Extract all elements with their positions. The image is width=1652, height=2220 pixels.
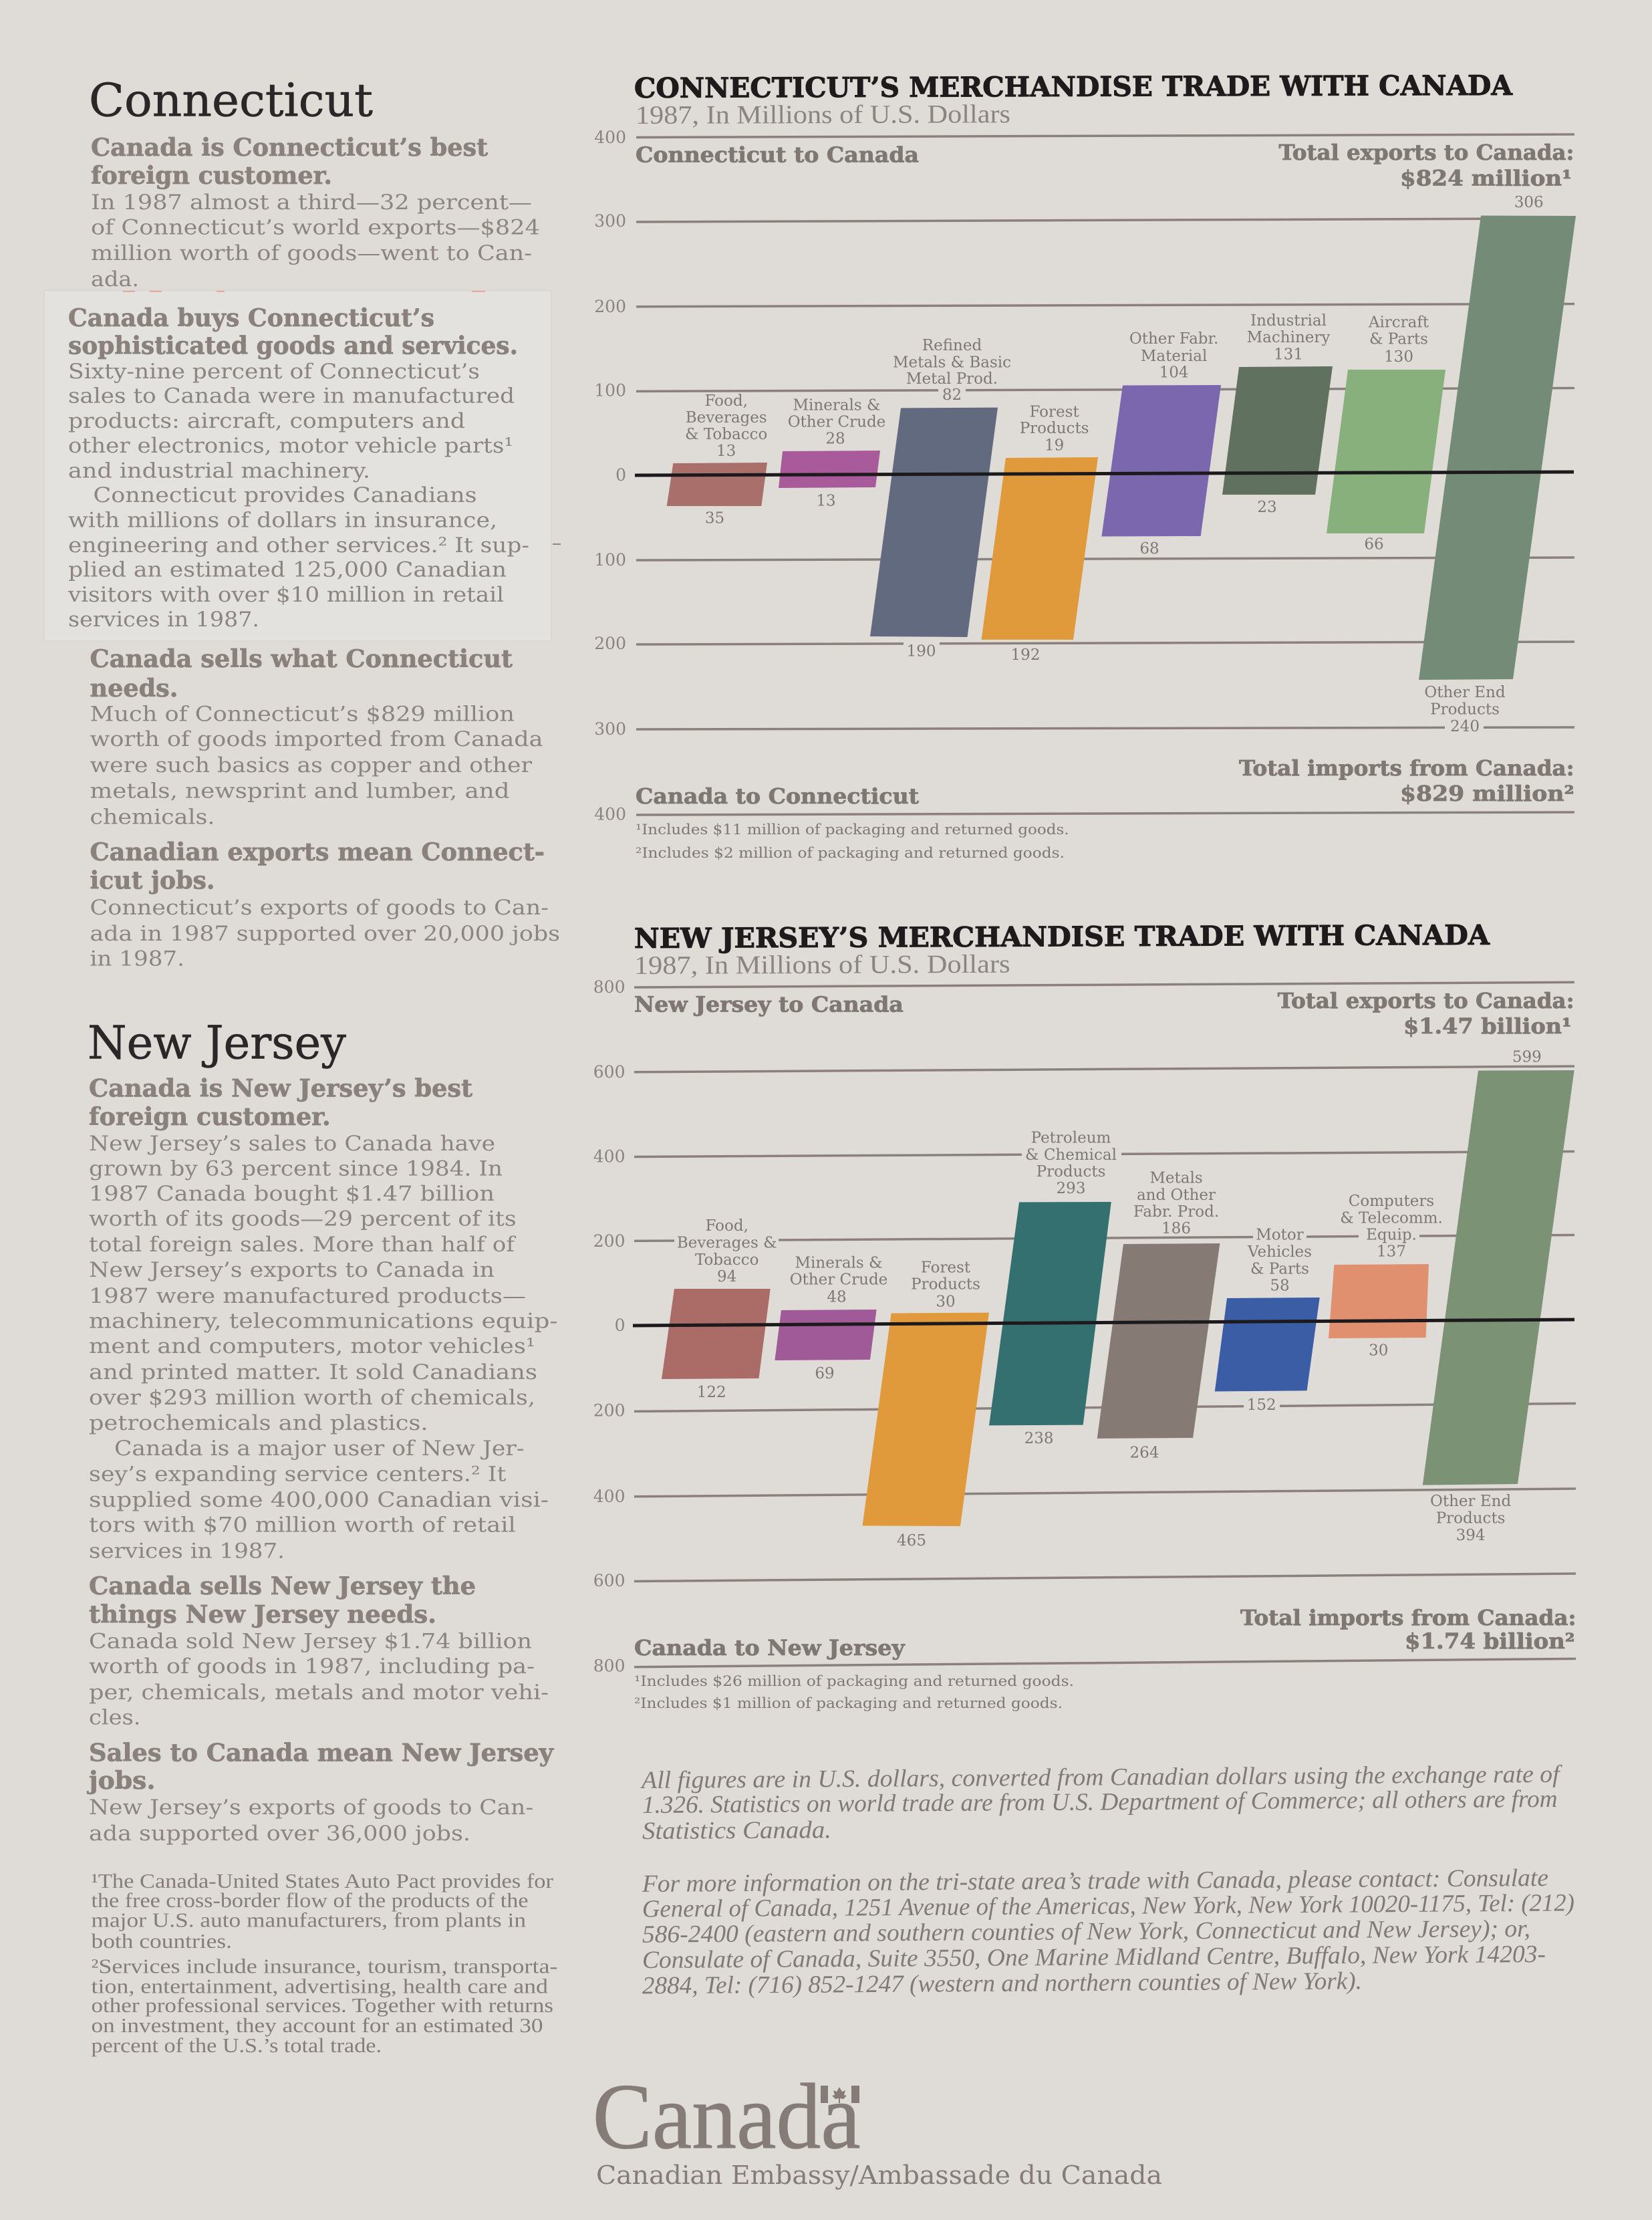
- bar: minerals and other crude: [775, 1310, 877, 1360]
- text block: currency note: All figures are in U.S. dollars, converted from Canadian dollars using the exchange rate of: [640, 1761, 1563, 1794]
- y axis labels: 600: [593, 1571, 626, 1590]
- import labels: [705, 492, 1506, 735]
- export labels: Metal Prod.: [906, 370, 998, 388]
- text block: column footnotes: ²Services include insurance, tourism, transporta-: [91, 1955, 557, 1978]
- text block: best foreign customer: sey’s expanding service centers.² It: [89, 1463, 507, 1487]
- y axis labels: 100: [594, 381, 626, 400]
- bar: other end products: [1423, 1070, 1574, 1485]
- text block: Sales to Canada mean New Jersey jobs: [87, 1739, 554, 1846]
- text block: Canada sells what Connecticut needs: chemicals.: [90, 805, 215, 829]
- bar: refined metals: [870, 408, 998, 637]
- chart title: CONNECTICUT’S MERCHANDISE TRADE WITH CANADA: [634, 70, 1513, 104]
- text block: Canada sells what Connecticut needs: Canada sells what Connecticut: [90, 645, 513, 673]
- export labels: Refined: [922, 337, 982, 354]
- export labels: Products: [1020, 420, 1089, 437]
- export labels: 137: [1377, 1243, 1406, 1261]
- import labels: 264: [1130, 1445, 1159, 1462]
- panel: pasted correction patch: sales to Canada were in manufactured: [68, 384, 515, 408]
- y axis labels: 300: [594, 719, 626, 739]
- export labels: 28: [825, 430, 845, 448]
- panel: Connecticut trade chart: [594, 70, 1576, 861]
- text block: column footnotes: percent of the U.S.’s total trade.: [91, 2033, 382, 2057]
- bar: food, beverages and tobacco: [662, 1289, 771, 1379]
- import labels: 69: [815, 1365, 835, 1382]
- text block: best foreign customer: petrochemicals and plastics.: [89, 1411, 428, 1435]
- bar: minerals and other crude: [779, 451, 880, 488]
- import labels: 238: [1024, 1430, 1054, 1447]
- text block: Sales to Canada mean New Jersey jobs: New Jersey’s exports of goods to Can-: [89, 1796, 533, 1820]
- text block: currency note: 1.326. Statistics on world trade are from U.S. Department of Commerce; all others are from: [642, 1785, 1558, 1819]
- export labels: Fabr. Prod.: [1133, 1203, 1219, 1221]
- export labels: 104: [1159, 364, 1189, 381]
- total exports callout: Total exports to Canada:: [1279, 140, 1574, 165]
- chart footnotes: ²Includes $2 million of packaging and returned goods.: [636, 845, 1065, 861]
- export labels: Other Fabr.: [1129, 330, 1218, 348]
- text block: best foreign customer: Canada is New Jersey’s best: [89, 1075, 472, 1103]
- total imports callout: $1.74 billion²: [1405, 1628, 1575, 1654]
- text block: best foreign customer: 1987 Canada bought $1.47 billion: [89, 1182, 495, 1206]
- imports header: Canada to Connecticut: [636, 783, 919, 809]
- text block: best foreign customer: foreign customer.: [89, 1103, 331, 1131]
- y axis labels: 800: [593, 1656, 626, 1676]
- text block: best foreign customer: machinery, telecommunications equip-: [89, 1309, 557, 1333]
- export labels: 94: [717, 1268, 736, 1285]
- import labels: 66: [1364, 536, 1384, 553]
- export labels: Other Crude: [790, 1271, 887, 1289]
- export labels: Metals & Basic: [893, 354, 1011, 372]
- export labels: 19: [1045, 437, 1064, 454]
- import labels: 30: [1369, 1342, 1388, 1359]
- text block: currency note: [640, 1761, 1563, 1845]
- imports header: Canada to New Jersey: [634, 1635, 906, 1660]
- total imports callout: [1240, 1605, 1576, 1654]
- panel: Connecticut text column: [44, 75, 561, 971]
- text block: best foreign customer: foreign customer.: [91, 162, 332, 190]
- y axis labels: 200: [593, 1231, 626, 1251]
- exports header: New Jersey to Canada: [634, 992, 904, 1017]
- y axis labels: 100: [594, 550, 626, 570]
- text block: best foreign customer: of Connecticut’s world exports—$824: [91, 215, 540, 239]
- panel: pasted correction patch: products: aircraft, computers and: [68, 409, 465, 433]
- y axis labels: 800: [593, 977, 626, 997]
- panel: pasted correction patch: engineering and other services.² It sup-: [68, 533, 529, 558]
- y axis labels: 200: [593, 1401, 626, 1421]
- export labels: Industrial: [1250, 312, 1327, 330]
- y axis labels: 200: [594, 634, 626, 653]
- export labels: Aircraft: [1368, 314, 1429, 332]
- export labels: Computers: [1349, 1193, 1434, 1210]
- export labels: 58: [1270, 1277, 1290, 1294]
- heading: New Jersey: New Jersey: [88, 1017, 347, 1070]
- export labels: Food,: [705, 1217, 748, 1235]
- bar: other end products: [1419, 215, 1576, 680]
- text block: best foreign customer: ment and computers, motor vehicles¹: [89, 1334, 535, 1358]
- total imports callout: Total imports from Canada:: [1240, 1605, 1576, 1630]
- import labels: 465: [897, 1532, 926, 1550]
- export labels: 30: [936, 1293, 956, 1311]
- text block: contact information: 2884, Tel: (716) 852-1247 (western and northern counties of New York).: [642, 1967, 1362, 1999]
- text block: best foreign customer: tors with $70 million worth of retail: [89, 1513, 516, 1537]
- text block: best foreign customer: supplied some 400,000 Canadian visi-: [89, 1488, 549, 1512]
- export labels: Equip.: [1366, 1227, 1417, 1244]
- export labels: 293: [1057, 1180, 1085, 1197]
- export labels: Material: [1141, 348, 1207, 365]
- text block: Sales to Canada mean New Jersey jobs: ada supported over 36,000 jobs.: [89, 1822, 470, 1846]
- export labels: 130: [1384, 348, 1413, 366]
- export labels: & Parts: [1369, 330, 1428, 348]
- text block: Canada sells New Jersey the things it needs: cles.: [89, 1706, 140, 1730]
- panel: pasted correction patch: sophisticated goods and services.: [68, 332, 518, 360]
- text block: best foreign customer: worth of its goods—29 percent of its: [89, 1207, 517, 1231]
- y axis labels: [594, 128, 626, 824]
- bar: computers and telecommunications equipment: [1329, 1264, 1429, 1338]
- total imports callout: Total imports from Canada:: [1239, 755, 1574, 781]
- signature: Canadian Embassy: Canadian Embassy/Ambassade du Canada: [596, 2161, 1162, 2190]
- chart subtitle: 1987, In Millions of U.S. Dollars: [634, 950, 1010, 980]
- export labels: & Telecomm.: [1340, 1210, 1443, 1227]
- zero baseline: [635, 472, 1574, 475]
- text block: Canada sells New Jersey the things it needs: per, chemicals, metals and motor vehi-: [89, 1681, 549, 1705]
- total exports callout: [1278, 988, 1574, 1039]
- export labels: Tobacco: [695, 1251, 759, 1269]
- export labels: [685, 194, 1544, 460]
- total exports callout: Total exports to Canada:: [1278, 988, 1574, 1013]
- text block: contact information: Consulate of Canada, Suite 3550, One Marine Midland Centre, Buffalo, New York 14203-: [642, 1941, 1546, 1974]
- panel: pasted correction patch: visitors with over $10 million in retail: [67, 583, 504, 607]
- text block: Canadian exports mean Connecticut jobs: [90, 838, 560, 971]
- text block: best foreign customer: grown by 63 percent since 1984. In: [89, 1156, 503, 1181]
- text block: Canada sells what Connecticut needs: worth of goods imported from Canada: [90, 727, 543, 751]
- text block: Canadian exports mean Connecticut jobs: icut jobs.: [90, 866, 215, 894]
- export labels: 48: [827, 1289, 847, 1306]
- import labels: 35: [705, 509, 724, 527]
- text block: Sales to Canada mean New Jersey jobs: jobs.: [87, 1767, 155, 1795]
- chart title: NEW JERSEY’S MERCHANDISE TRADE WITH CANADA: [634, 919, 1490, 955]
- text block: column footnotes: the free cross-border flow of the products of the: [91, 1888, 528, 1912]
- text block: Canada sells New Jersey the things it needs: worth of goods in 1987, including pa-: [89, 1654, 535, 1679]
- text block: Canadian exports mean Connecticut jobs: in 1987.: [90, 947, 184, 971]
- text block: Sales to Canada mean New Jersey jobs: Sales to Canada mean New Jersey: [89, 1739, 554, 1767]
- export labels: 186: [1161, 1220, 1191, 1237]
- export labels: Products: [1037, 1163, 1105, 1181]
- export labels: Minerals &: [795, 1255, 882, 1272]
- text block: contact information: For more information on the tri-state area’s trade with Canada, please contact: Consulate: [642, 1864, 1548, 1898]
- panel: New Jersey text column: [87, 1017, 558, 2057]
- export labels: 13: [716, 443, 736, 460]
- y axis labels: 400: [594, 128, 626, 147]
- text block: column footnotes: other professional services. Together with returns: [91, 1993, 553, 2017]
- export labels: Beverages: [686, 409, 767, 426]
- heading: Connecticut: Connecticut: [89, 75, 373, 127]
- text block: best foreign customer: Canada is Connecticut’s best: [91, 134, 488, 162]
- export labels: Machinery: [1247, 329, 1330, 346]
- import labels: Products: [1430, 701, 1500, 719]
- bar: food, beverages and tobacco: [667, 463, 767, 506]
- total exports callout: $1.47 billion¹: [1403, 1013, 1572, 1039]
- text block: Canada sells what Connecticut needs: needs.: [90, 674, 178, 703]
- text block: Canada sells what Connecticut needs: metals, newsprint and lumber, and: [90, 779, 509, 804]
- text block: Canadian exports mean Connecticut jobs: ada in 1987 supported over 20,000 jobs: [90, 922, 560, 946]
- bar: petroleum and chemical products: [989, 1202, 1111, 1425]
- panel: pasted correction patch: other electronics, motor vehicle parts¹: [68, 434, 513, 458]
- import labels: 152: [1247, 1396, 1276, 1414]
- text block: Canada sells New Jersey the things it needs: things New Jersey needs.: [89, 1600, 436, 1628]
- icon: flag symbol: [821, 2086, 859, 2103]
- export labels: & Chemical: [1025, 1146, 1117, 1164]
- bar: metals and other fabricated products: [1097, 1243, 1220, 1439]
- y axis labels: 200: [594, 297, 626, 316]
- y axis labels: 0: [615, 1316, 626, 1335]
- chart subtitle: 1987, In Millions of U.S. Dollars: [636, 100, 1010, 130]
- text block: best foreign customer: million worth of goods—went to Can-: [91, 241, 532, 265]
- text block: best foreign customer: [91, 134, 540, 291]
- export labels: [677, 1049, 1542, 1311]
- text block: best foreign customer: [89, 1075, 557, 1563]
- import labels: Products: [1436, 1510, 1505, 1527]
- text block: best foreign customer: In 1987 almost a third—32 percent—: [91, 191, 532, 215]
- panel: pasted correction patch: services in 1987.: [68, 608, 259, 632]
- import labels: Other End: [1424, 684, 1506, 701]
- import labels: 394: [1456, 1527, 1486, 1544]
- text block: best foreign customer: 1987 were manufactured products—: [89, 1284, 526, 1308]
- export labels: and Other: [1137, 1187, 1216, 1204]
- export labels: & Parts: [1250, 1261, 1309, 1278]
- import labels: 68: [1139, 540, 1159, 558]
- import labels: Other End: [1430, 1493, 1511, 1510]
- panel: pasted correction patch: Sixty-nine percent of Connecticut’s: [68, 360, 480, 384]
- export labels: Other Crude: [788, 414, 885, 431]
- text block: column footnotes: tion, entertainment, advertising, health care and: [91, 1975, 549, 1998]
- panel: pasted correction patch: Canada buys Connecticut’s: [68, 304, 434, 332]
- total exports callout: [1279, 140, 1574, 191]
- text block: contact information: General of Canada, 1251 Avenue of the Americas, New York, New York 10020-1175, Tel: (212): [642, 1889, 1574, 1923]
- export labels: Metals: [1149, 1169, 1203, 1187]
- text block: best foreign customer: ada.: [91, 267, 139, 291]
- export labels: Motor: [1256, 1227, 1304, 1244]
- export labels: 599: [1512, 1049, 1542, 1066]
- import labels: 13: [816, 492, 836, 509]
- text block: best foreign customer: Canada is a major user of New Jer-: [114, 1437, 524, 1461]
- export labels: & Tobacco: [685, 426, 767, 443]
- text block: best foreign customer: and printed matter. It sold Canadians: [89, 1360, 537, 1384]
- import labels: [697, 1342, 1511, 1550]
- text block: best foreign customer: services in 1987.: [89, 1539, 285, 1563]
- text block: Canadian exports mean Connecticut jobs: Connecticut’s exports of goods to Can-: [90, 896, 549, 920]
- panel: pasted correction patch: [44, 290, 551, 641]
- panel: pasted correction patch: Connecticut provides Canadians: [94, 483, 477, 507]
- y axis labels: 0: [615, 465, 626, 485]
- text block: column footnotes: ¹The Canada-United States Auto Pact provides for: [91, 1869, 554, 1892]
- panel: pasted correction patch: and industrial machinery.: [68, 459, 370, 483]
- text block: column footnotes: major U.S. auto manufacturers, from plants in: [91, 1908, 527, 1932]
- export labels: Petroleum: [1031, 1130, 1111, 1147]
- export labels: 82: [942, 386, 962, 404]
- text block: Canada sells New Jersey the things it needs: Canada sells New Jersey the: [89, 1572, 476, 1600]
- export labels: Food,: [704, 392, 748, 410]
- text block: best foreign customer: New Jersey’s sales to Canada have: [89, 1132, 495, 1156]
- import labels: 23: [1257, 499, 1277, 516]
- text block: column footnotes: both countries.: [91, 1929, 232, 1953]
- chart footnotes: [634, 1673, 1074, 1711]
- total imports callout: $829 million²: [1400, 781, 1574, 806]
- y axis labels: 300: [594, 211, 626, 231]
- chart footnotes: [636, 822, 1069, 861]
- total imports callout: [1239, 755, 1574, 806]
- text block: best foreign customer: over $293 million worth of chemicals,: [89, 1386, 535, 1410]
- panel: pasted correction patch: plied an estimated 125,000 Canadian: [68, 558, 507, 582]
- export labels: Products: [911, 1276, 980, 1293]
- bar: other fabricated material: [1101, 385, 1221, 536]
- text block: Canada sells what Connecticut needs: were such basics as copper and other: [90, 753, 532, 777]
- import labels: 122: [697, 1384, 726, 1401]
- text block: column footnotes: [91, 1869, 557, 2057]
- import labels: 190: [907, 643, 936, 660]
- import labels: 192: [1011, 646, 1040, 664]
- bar: aircraft and parts: [1327, 370, 1446, 533]
- logo: Canada wordmark with flag: Canada: [593, 2065, 861, 2169]
- y axis labels: 400: [593, 1147, 626, 1166]
- chart footnotes: ¹Includes $11 million of packaging and returned goods.: [636, 822, 1069, 838]
- y axis labels: [593, 977, 626, 1676]
- bar: industrial machinery: [1222, 366, 1333, 495]
- text block: Canadian exports mean Connecticut jobs: Canadian exports mean Connect-: [90, 838, 545, 866]
- bar: forest products: [981, 457, 1098, 640]
- zero baseline: [633, 1320, 1574, 1326]
- chart footnotes: ¹Includes $26 million of packaging and returned goods.: [634, 1673, 1074, 1689]
- y axis labels: 600: [593, 1062, 626, 1082]
- bar: forest products: [862, 1313, 989, 1526]
- export labels: 131: [1274, 346, 1303, 364]
- text block: contact information: 586-2400 (eastern and southern counties of New York, Connecticut and New Jersey); or,: [642, 1915, 1530, 1949]
- text block: column footnotes: on investment, they account for an estimated 30: [91, 2013, 543, 2037]
- export labels: Beverages &: [677, 1235, 777, 1252]
- text block: currency note: Statistics Canada.: [642, 1816, 831, 1845]
- y axis labels: 400: [593, 1487, 626, 1506]
- text block: best foreign customer: total foreign sales. More than half of: [89, 1233, 517, 1257]
- y axis labels: 400: [594, 805, 626, 824]
- import labels: 240: [1450, 718, 1480, 735]
- total exports callout: $824 million¹: [1400, 166, 1572, 191]
- text block: contact information: [642, 1864, 1574, 1999]
- panel: New Jersey trade chart: [593, 919, 1576, 1711]
- export labels: Vehicles: [1247, 1243, 1312, 1261]
- export labels: 306: [1514, 194, 1544, 211]
- text block: Canada sells New Jersey the things it needs: [89, 1572, 549, 1730]
- bar: motor vehicles and parts: [1215, 1298, 1320, 1392]
- panel: pasted correction patch: with millions of dollars in insurance,: [68, 508, 497, 532]
- export labels: Minerals &: [793, 397, 880, 414]
- export labels: Forest: [1029, 403, 1079, 420]
- text block: Canada sells what Connecticut needs: [90, 645, 543, 829]
- text block: Canada sells what Connecticut needs: Much of Connecticut’s $829 million: [90, 702, 515, 726]
- text block: best foreign customer: New Jersey’s exports to Canada in: [89, 1258, 495, 1282]
- exports header: Connecticut to Canada: [636, 142, 919, 167]
- chart footnotes: ²Includes $1 million of packaging and returned goods.: [634, 1695, 1063, 1711]
- export labels: Forest: [921, 1259, 971, 1277]
- text block: Canada sells New Jersey the things it needs: Canada sold New Jersey $1.74 billion: [89, 1630, 532, 1654]
